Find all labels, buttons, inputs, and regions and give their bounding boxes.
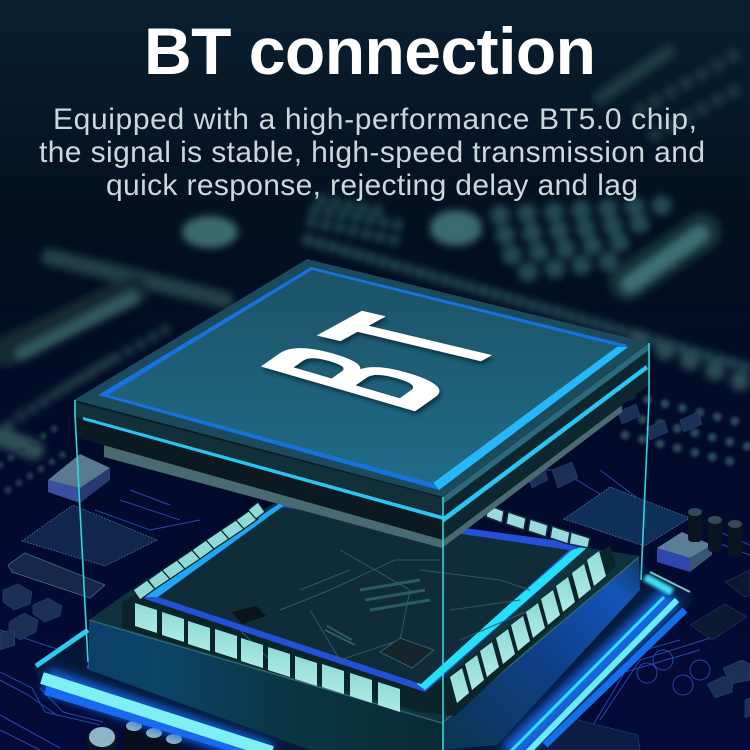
top frame xyxy=(74,259,649,497)
side layers: right xyxy=(443,343,649,540)
BT lettering: T xyxy=(270,299,556,382)
description text: the signal is stable, high-speed transmission and xyxy=(39,136,705,169)
circuit traces xyxy=(0,470,750,750)
description text: Equipped with a high-performance BT5.0 chip, xyxy=(53,103,697,136)
right QFP chip xyxy=(564,487,690,546)
die surface with circuit traces xyxy=(158,507,569,684)
small board chips and components xyxy=(0,404,750,750)
left cube component xyxy=(48,454,110,503)
bottom-left capacitors xyxy=(86,721,183,750)
pads: back-left row xyxy=(133,502,265,600)
pads: front-left row xyxy=(135,603,400,712)
left connector row xyxy=(8,553,105,598)
lower chip die with blue rim xyxy=(139,503,590,692)
small resistors and blocks xyxy=(0,404,750,750)
side layers: left xyxy=(74,400,443,540)
title: BT connection xyxy=(144,14,596,88)
description text xyxy=(39,103,705,202)
BT lettering xyxy=(209,299,556,428)
pad rails xyxy=(122,545,616,716)
blue rim xyxy=(98,267,628,490)
BT lettering: B xyxy=(209,325,502,428)
lower chip base block xyxy=(89,500,640,750)
underside plate xyxy=(104,400,622,548)
pads: front-right row xyxy=(450,551,606,703)
left QFP chip xyxy=(22,505,157,566)
right cube component xyxy=(657,532,712,572)
electrolytic capacitors right xyxy=(688,508,742,556)
pads: back-right row xyxy=(486,505,590,548)
description text: quick response, rejecting delay and lag xyxy=(106,169,638,202)
upper floating chip xyxy=(74,259,649,548)
glowing base ring xyxy=(33,565,693,750)
glass box lines xyxy=(75,343,649,750)
top panel xyxy=(108,270,618,483)
